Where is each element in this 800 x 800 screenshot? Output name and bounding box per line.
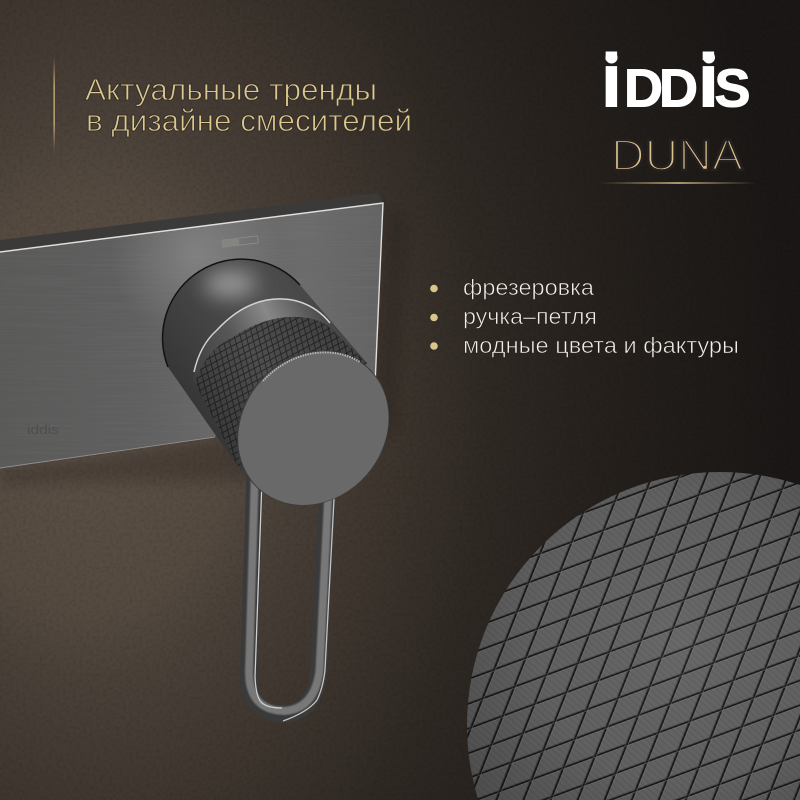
wall plate bbox=[0, 190, 400, 480]
DUNA series name: DUNA bbox=[611, 131, 744, 180]
iDDiS logo: S bbox=[714, 58, 751, 118]
texture close-up circle bbox=[460, 470, 800, 800]
iDDiS logo: D bbox=[624, 58, 663, 118]
plate shadow bbox=[0, 205, 404, 484]
item: milling: фрезеровка bbox=[463, 275, 595, 300]
feature list bbox=[430, 275, 739, 358]
faucet product photo bbox=[0, 190, 421, 721]
base cylinder bbox=[163, 259, 367, 470]
iDDiS logo: i bbox=[601, 38, 622, 122]
iDDiS logo: i bbox=[698, 38, 719, 122]
logo dots bbox=[606, 52, 715, 64]
collar bbox=[193, 299, 330, 383]
temperature indicator bbox=[222, 236, 258, 247]
knob end face bbox=[205, 319, 421, 537]
heading: Актуальные тренды bbox=[85, 72, 377, 107]
item: colours and textures: модные цвета и фактуры bbox=[463, 333, 739, 358]
vertical gold rule bbox=[54, 57, 55, 152]
iDDiS logo: D bbox=[659, 58, 698, 118]
gold underline bbox=[600, 182, 756, 184]
heading: в дизайне смесителей bbox=[86, 103, 412, 138]
knurled grip bbox=[195, 317, 367, 470]
heading bbox=[85, 72, 412, 138]
loop handle bbox=[248, 470, 335, 721]
plate logo: iddis bbox=[27, 422, 60, 437]
item: loop handle: ручка–петля bbox=[463, 304, 597, 329]
